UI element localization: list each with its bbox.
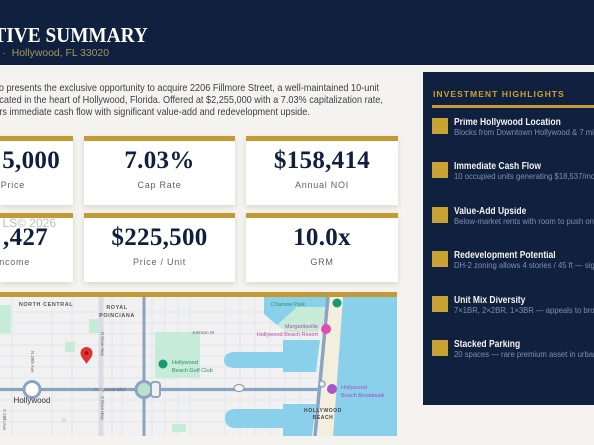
intro paragraph: rs immediate cash flow with significant value-add and redevelopment upside. [0,107,310,118]
icons: place markers [158,298,342,394]
map labels: Hollywood Blvd [94,387,126,392]
map labels: S Dixie Hwy [100,396,105,420]
description: 20 spaces — rare premium asset in urban [454,350,594,359]
label: Cap Rate [137,180,182,190]
icon [432,207,448,223]
panel: investment highlights [423,72,594,405]
map labels: POINCIANA [99,313,135,319]
highlight: unit mix [432,296,594,315]
icon [432,296,448,312]
value: $158,414 [274,147,370,174]
map labels: Margaritaville [285,324,318,330]
intro paragraph [0,83,383,118]
highlight: cash flow [432,162,594,181]
panel heading: INVESTMENT HIGHLIGHTS [433,89,565,99]
label: Price / Unit [133,257,186,267]
map top accent [0,292,397,297]
KPI card: cap rate [84,136,235,205]
intracoastal waterway [224,297,328,436]
subtitle: location: · Hollywood, FL 33020 [3,48,109,59]
KPI card: price [0,136,73,205]
highlight: parking [432,340,594,359]
KPI card: price per unit [84,213,235,282]
map labels [2,302,385,431]
map labels: Hollywood [172,360,198,366]
map [0,297,397,436]
icon [432,162,448,178]
KPI card: annual NOI [246,136,398,205]
icon [432,118,448,134]
KPI card: GRM [246,213,398,282]
map labels: Hollywood [341,385,367,391]
description: 10 occupied units generating $18,537/mo [454,172,594,181]
panel heading rule [432,105,594,108]
map labels: Hollywood [14,396,50,405]
icon [432,340,448,356]
map labels: S 28th Ave [2,409,7,431]
map labels: Beach Broadwalk [341,393,385,399]
map labels: NORTH CENTRAL [19,302,73,308]
roundabouts [24,382,40,398]
map labels: Johnson St [192,330,215,335]
value: 7.03% [124,147,195,174]
highlight: value add [432,207,594,226]
highlight: location [432,118,594,137]
description: Blocks from Downtown Hollywood & 7 mi [454,128,594,137]
value: 5,000 [2,147,60,174]
highways [0,297,328,436]
map labels: N Dixie Hwy [100,332,105,357]
icon: red location pin [80,347,92,364]
map labels: N 28th Ave [30,351,35,373]
map labels: HOLLYWOOD [304,408,342,414]
map labels: BEACH [313,415,333,421]
value: 10.0x [293,224,351,251]
map labels: Charnow Park [271,302,305,308]
ocean [333,297,397,436]
map labels: ROYAL [106,305,128,311]
street grid [0,297,330,436]
label: GRM [310,257,334,267]
map labels: Beach Golf Club [172,368,213,374]
beach strip [318,297,343,436]
label: ncome [0,257,30,267]
icon [432,251,448,267]
watermark: LS© 2026 [2,216,56,230]
intro paragraph: o presents the exclusive opportunity to acquire 2206 Fillmore Street, a well-maintained 10-unit [0,83,379,94]
label: Annual NOI [295,180,349,190]
label: Price [1,180,25,190]
intro paragraph: cated in the heart of Hollywood, Florida. Offered at $2,255,000 with a 7.03% capitalization rate, [0,95,383,106]
highlight: redevelopment [432,251,594,270]
parks [0,305,327,432]
header band [0,0,594,65]
KPI card: income [0,213,73,282]
map labels: Hollywood Beach Resort [257,332,318,338]
value: $225,500 [111,224,208,251]
value: ,427 [3,224,48,251]
description: Below-market rents with room to push on [454,217,594,226]
